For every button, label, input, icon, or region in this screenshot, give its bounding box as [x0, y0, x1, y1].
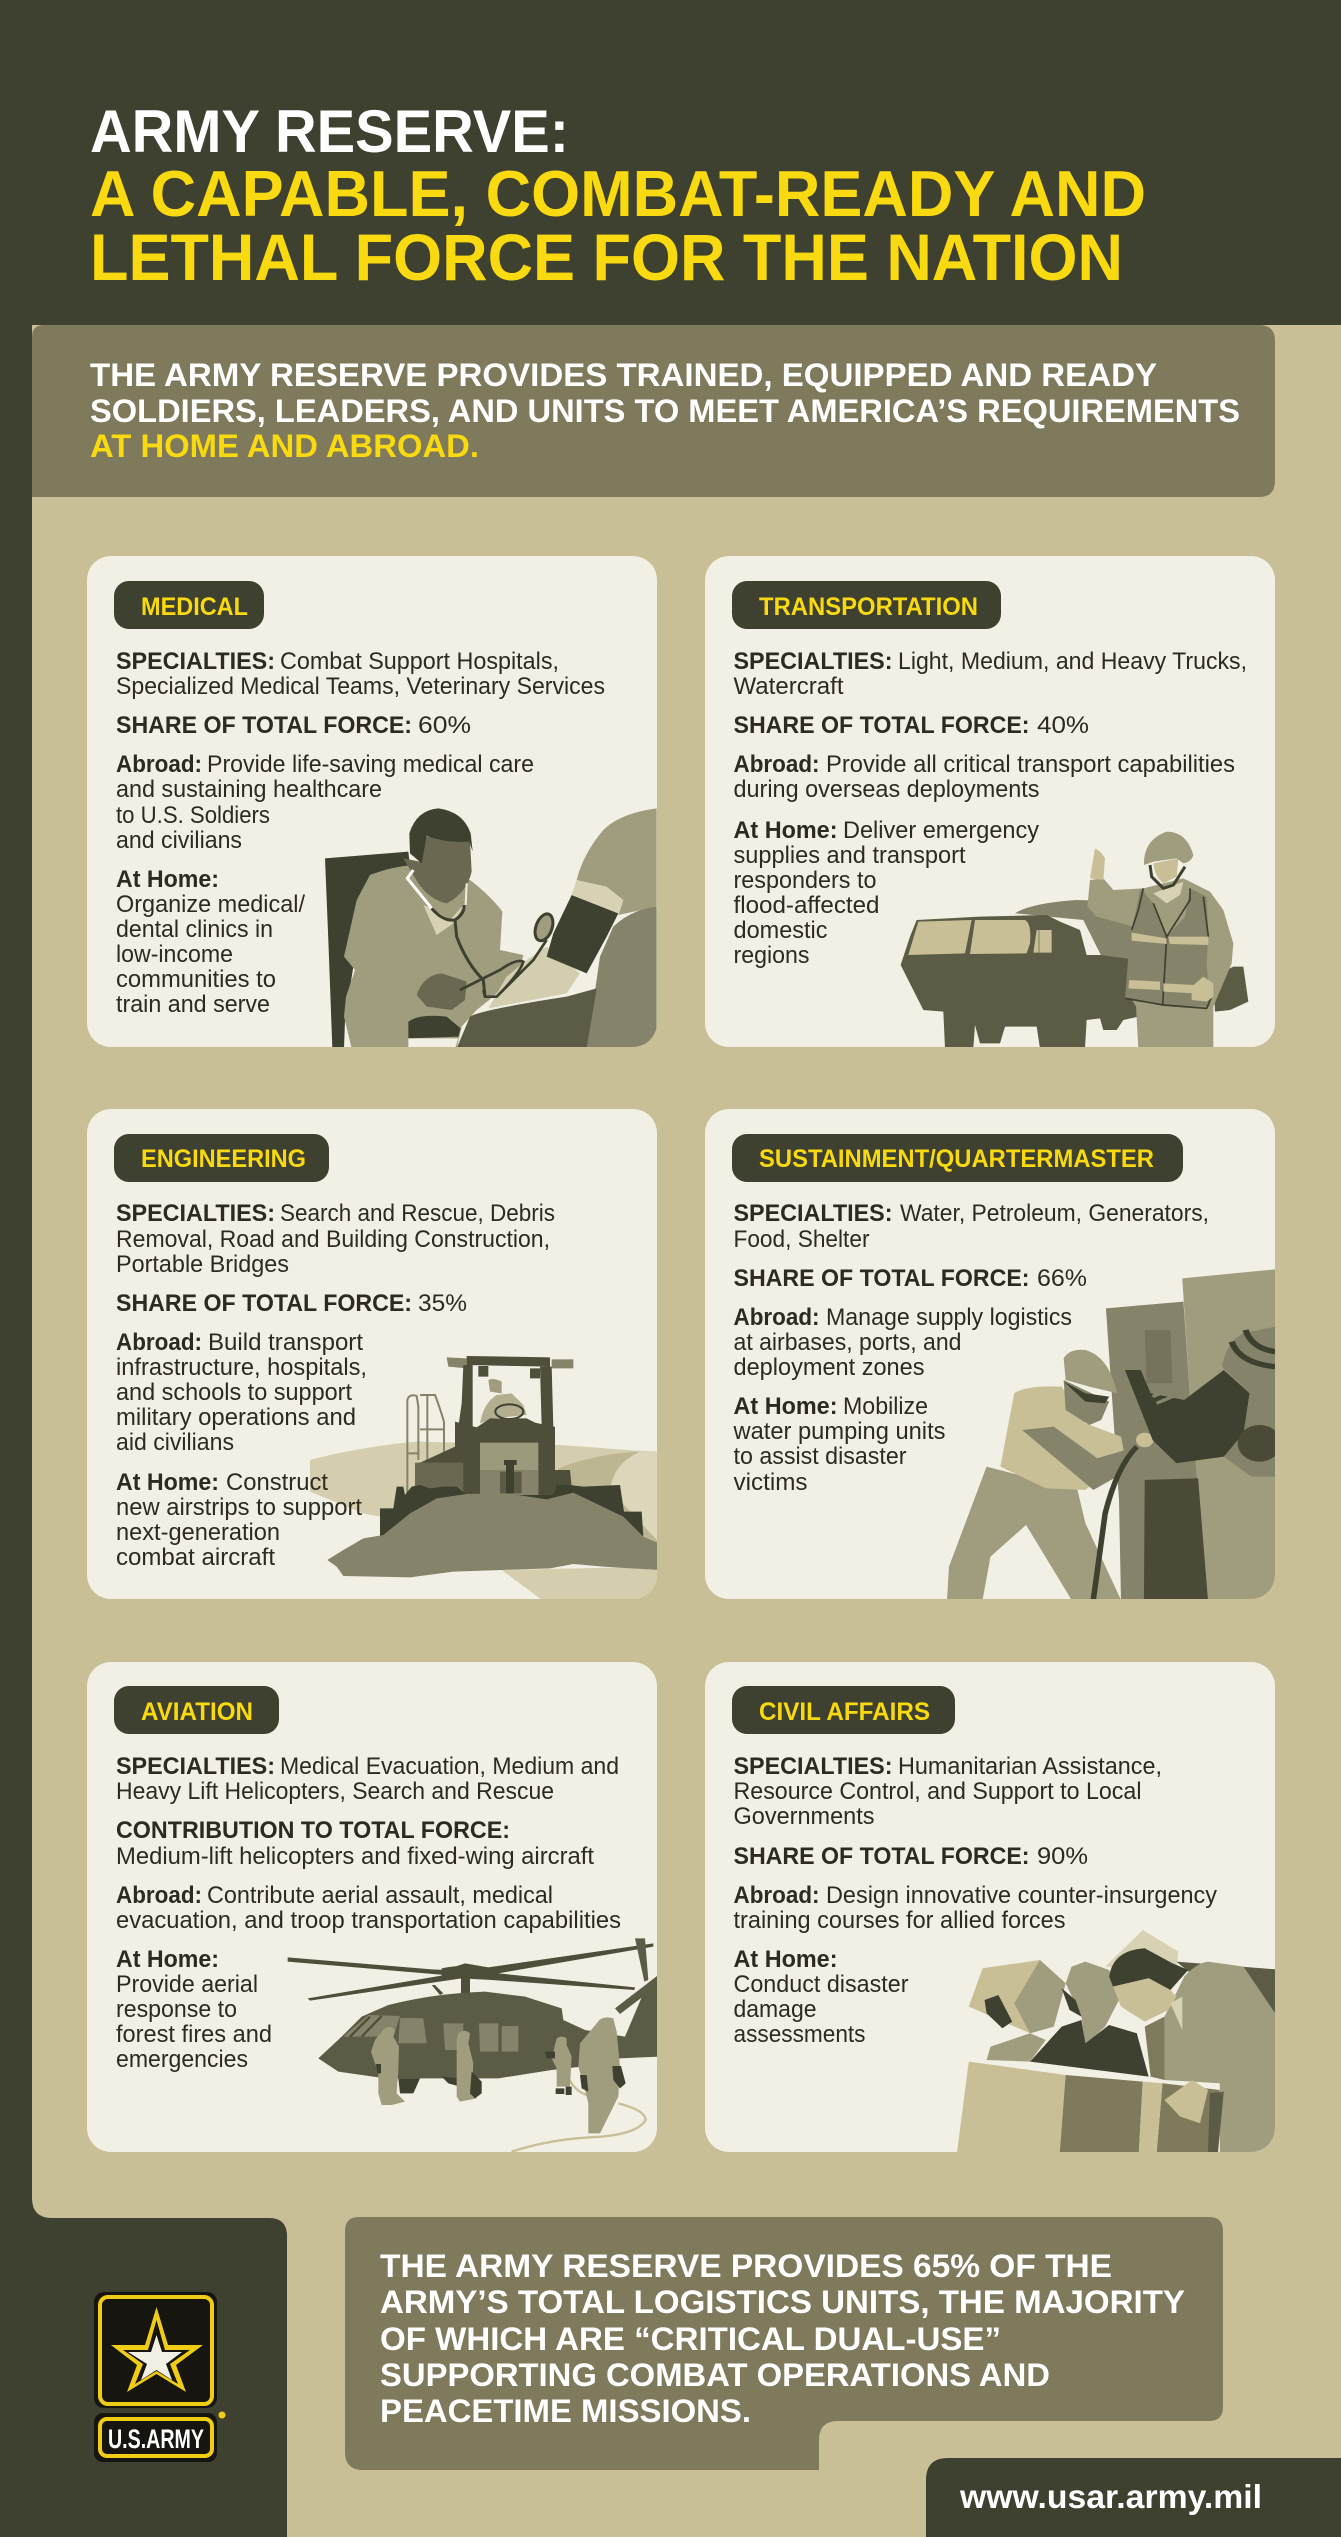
text: civil affairs details: SPECIALTIES: [734, 1753, 892, 1780]
title: ARMY RESERVE: [90, 98, 569, 165]
heading pill: engineering [114, 1134, 329, 1182]
text: sustainment details: at airbases, ports, and [734, 1329, 962, 1356]
heading pill: medical: MEDICAL [141, 593, 248, 621]
text: engineering details: Portable Bridges [116, 1251, 289, 1278]
text: medical details: to U.S. Soldiers [116, 802, 270, 829]
logo: U.S. Army star: U.S.ARMY [108, 2424, 204, 2454]
text: civil affairs details: At Home: [734, 1946, 838, 1973]
illustration: civil affairs soldiers with boxes [957, 1930, 1275, 2153]
text: sustainment details: SHARE OF TOTAL FORCE: [734, 1265, 1030, 1292]
text: aviation details [116, 1753, 621, 2073]
text: transportation details: during overseas deployments [734, 776, 1040, 803]
text: transportation details: Deliver emergency [843, 817, 1039, 844]
text: engineering details: next-generation [116, 1519, 280, 1546]
text: transportation details: Provide all critical transport capabilities [826, 751, 1235, 778]
text: civil affairs details: assessments [734, 2021, 866, 2048]
title: LETHAL FORCE FOR THE NATION [90, 220, 1123, 294]
text: transportation details: Watercraft [734, 673, 844, 700]
text: aviation details: CONTRIBUTION TO TOTAL FORCE: [116, 1817, 510, 1844]
text: aviation details: evacuation, and troop transportation capabilities [116, 1907, 621, 1934]
text: civil affairs details: Resource Control, and Support to Local [734, 1778, 1142, 1805]
text: transportation details: At Home: [734, 817, 838, 844]
text: sustainment details: 66% [1037, 1265, 1087, 1292]
callout: logistics statement: PEACETIME MISSIONS. [380, 2393, 751, 2429]
text: engineering details: infrastructure, hospitals, [116, 1354, 367, 1381]
text: civil affairs details: Humanitarian Assistance, [898, 1753, 1162, 1780]
text: transportation details: flood-affected [734, 892, 880, 919]
text: engineering details: new airstrips to support [116, 1494, 362, 1521]
text: transportation details [734, 648, 1247, 969]
text: engineering details: military operations and [116, 1404, 356, 1431]
illustration: helicopter and crew [288, 1938, 658, 2152]
text: sustainment details: At Home: [734, 1393, 838, 1420]
text: medical details: and civilians [116, 827, 242, 854]
text: medical details: Abroad: [116, 751, 202, 778]
text: medical details: Combat Support Hospitals, [280, 648, 559, 675]
text: engineering details: Abroad: [116, 1329, 202, 1356]
text: sustainment details: Water, Petroleum, Generators, [900, 1200, 1209, 1227]
panel: engineering [87, 1109, 660, 1603]
text: medical details: communities to [116, 966, 276, 993]
title [90, 98, 1146, 294]
text: medical details: and sustaining healthcare [116, 776, 382, 803]
text: aviation details: forest fires and [116, 2021, 272, 2048]
callout: logistics statement: SUPPORTING COMBAT OPERATIONS AND [380, 2357, 1050, 2393]
text: sustainment details: water pumping units [733, 1418, 946, 1445]
text: aviation details: response to [116, 1996, 237, 2023]
text: engineering details: SPECIALTIES: [116, 1200, 275, 1227]
text: civil affairs details: Conduct disaster [734, 1971, 909, 1998]
text: medical details: SPECIALTIES: [116, 648, 275, 675]
illustration: medic taking blood pressure [325, 808, 657, 1048]
text: transportation details: Light, Medium, and Heavy Trucks, [898, 648, 1247, 675]
text: aviation details: emergencies [116, 2046, 248, 2073]
text: civil affairs details: 90% [1037, 1843, 1088, 1870]
text: aviation details: SPECIALTIES: [116, 1753, 275, 1780]
panel: aviation [87, 1662, 658, 2152]
heading pill: transportation [732, 581, 1001, 629]
text: medical details: Provide life-saving medical care [207, 751, 534, 778]
text: sustainment details: victims [734, 1469, 808, 1496]
text: civil affairs details: damage [734, 1996, 816, 2023]
text: civil affairs details: SHARE OF TOTAL FORCE: [734, 1843, 1030, 1870]
logo: U.S. Army star [94, 2292, 226, 2462]
text: transportation details: supplies and transport [734, 842, 966, 869]
panel: sustainment/quartermaster [705, 1109, 1281, 1600]
callout: logistics statement: OF WHICH ARE “CRITICAL DUAL-USE” [380, 2321, 1001, 2357]
callout: logistics statement [345, 2217, 1223, 2470]
title: A CAPABLE, COMBAT-READY AND [90, 157, 1146, 230]
text: engineering details: Search and Rescue, Debris [280, 1200, 555, 1227]
panel: intro statement [32, 325, 1275, 497]
text: sustainment details: deployment zones [734, 1354, 924, 1381]
text: transportation details: SHARE OF TOTAL FORCE: [734, 712, 1030, 739]
illustration: workers with water pump [947, 1269, 1281, 1600]
website url box: www.usar.army.mil [959, 2478, 1262, 2515]
text: civil affairs details: Governments [734, 1803, 874, 1830]
text: transportation details: responders to [734, 867, 876, 894]
callout: logistics statement: THE ARMY RESERVE PROVIDES 65% OF THE [380, 2248, 1112, 2284]
heading pill: medical [114, 581, 264, 629]
text: aviation details: Heavy Lift Helicopters, Search and Rescue [116, 1778, 554, 1805]
heading pill: aviation: AVIATION [141, 1698, 253, 1726]
callout: logistics statement: ARMY’S TOTAL LOGISTICS UNITS, THE MAJORITY [380, 2284, 1185, 2320]
text: medical details: SHARE OF TOTAL FORCE: [116, 712, 412, 739]
text: transportation details: SPECIALTIES: [734, 648, 892, 675]
text: sustainment details: Mobilize [843, 1393, 928, 1420]
text: aviation details: At Home: [116, 1946, 219, 1973]
panel: medical [87, 556, 657, 1048]
text: transportation details: domestic [734, 917, 828, 944]
text: engineering details: Construct [226, 1469, 328, 1496]
text: transportation details: Abroad: [734, 751, 820, 778]
text: medical details: dental clinics in [116, 916, 273, 943]
text: medical details: Specialized Medical Teams, Veterinary Services [116, 673, 605, 700]
text: transportation details: regions [734, 942, 810, 969]
text: engineering details: Build transport [208, 1329, 363, 1356]
heading pill: civil affairs [732, 1686, 955, 1734]
panel: intro statement: AT HOME AND ABROAD. [90, 428, 479, 464]
heading pill: civil affairs: CIVIL AFFAIRS [759, 1698, 930, 1726]
website url box [926, 2458, 1341, 2537]
heading pill: aviation [114, 1686, 279, 1734]
text: sustainment details: Abroad: [734, 1304, 820, 1331]
panel: intro statement: THE ARMY RESERVE PROVIDES TRAINED, EQUIPPED AND READY [90, 357, 1157, 393]
text: transportation details: 40% [1037, 712, 1089, 739]
text: civil affairs details: training courses for allied forces [734, 1907, 1066, 1934]
text: aviation details: Abroad: [116, 1882, 202, 1909]
text: sustainment details: SPECIALTIES: [734, 1200, 892, 1227]
text: medical details: 60% [418, 712, 471, 739]
text: civil affairs details: Design innovative counter-insurgency [826, 1882, 1217, 1909]
text: aviation details: Contribute aerial assault, medical [207, 1882, 553, 1909]
text: civil affairs details: Abroad: [734, 1882, 820, 1909]
text: sustainment details: to assist disaster [734, 1443, 907, 1470]
text: aviation details: Provide aerial [116, 1971, 258, 1998]
text: medical details: Organize medical/ [116, 891, 305, 918]
text: engineering details: combat aircraft [116, 1544, 275, 1571]
text: engineering details [116, 1200, 555, 1571]
text: sustainment details: Manage supply logistics [826, 1304, 1072, 1331]
illustration: front loader on dirt [310, 1356, 660, 1603]
panel: intro statement: SOLDIERS, LEADERS, AND UNITS TO MEET AMERICA’S REQUIREMENTS [90, 393, 1240, 429]
text: aviation details: Medium-lift helicopters and fixed-wing aircraft [116, 1843, 594, 1870]
heading pill: sustainment/quartermaster [732, 1134, 1183, 1182]
text: engineering details: Removal, Road and Building Construction, [116, 1226, 550, 1253]
heading pill: sustainment/quartermaster: SUSTAINMENT/QUARTERMASTER [759, 1145, 1154, 1173]
text: medical details [116, 648, 605, 1018]
text: engineering details: 35% [418, 1290, 467, 1317]
panel: transportation [705, 556, 1275, 1048]
text: medical details: At Home: [116, 866, 219, 893]
text: medical details: train and serve [116, 991, 270, 1018]
illustration: soldier and truck [901, 832, 1248, 1048]
text: civil affairs details [734, 1753, 1217, 2048]
text: sustainment details [733, 1200, 1209, 1496]
text: aviation details: Medical Evacuation, Medium and [280, 1753, 619, 1780]
panel: civil affairs [705, 1662, 1275, 2153]
text: engineering details: aid civilians [116, 1429, 234, 1456]
text: medical details: low-income [116, 941, 233, 968]
text: engineering details: and schools to support [116, 1379, 352, 1406]
text: engineering details: At Home: [116, 1469, 219, 1496]
heading pill: engineering: ENGINEERING [141, 1145, 306, 1173]
text: engineering details: SHARE OF TOTAL FORCE: [116, 1290, 412, 1317]
text: sustainment details: Food, Shelter [734, 1226, 870, 1253]
heading pill: transportation: TRANSPORTATION [759, 593, 978, 621]
